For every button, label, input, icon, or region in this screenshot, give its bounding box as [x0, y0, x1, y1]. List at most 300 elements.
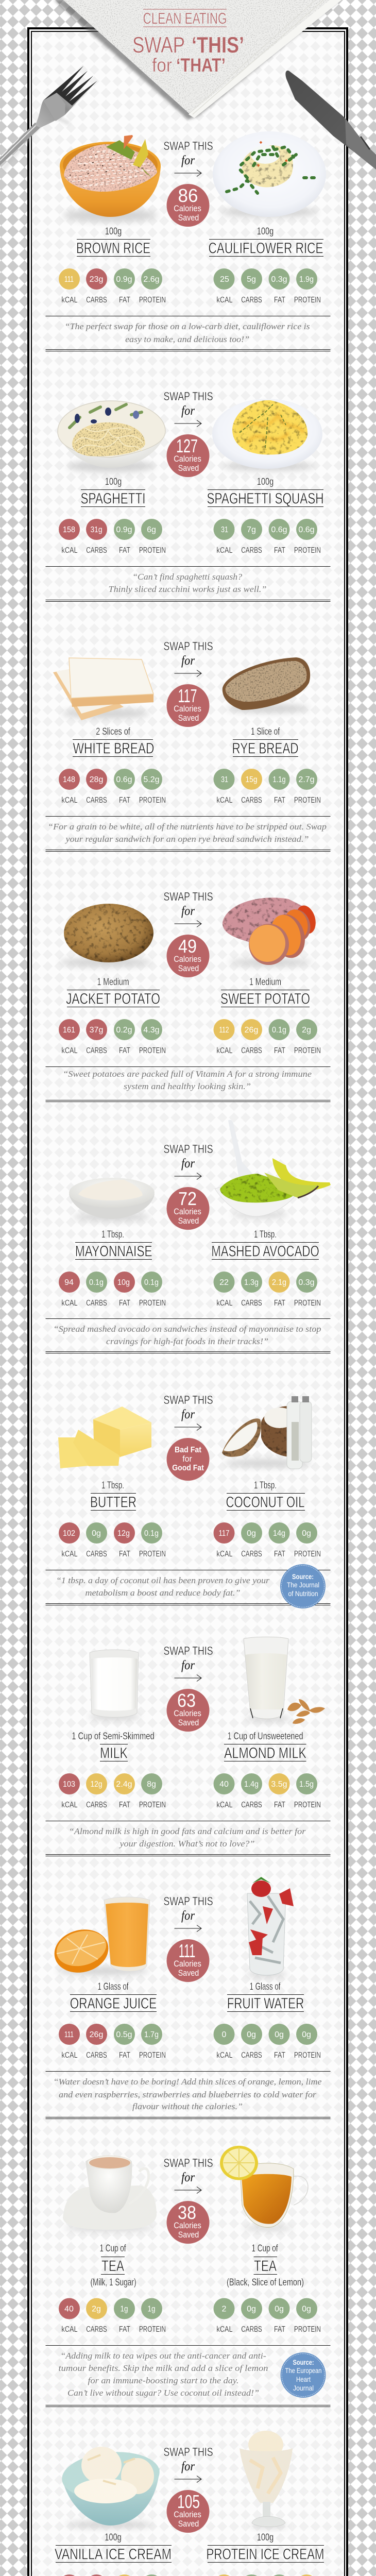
- left nutrition values: [59, 519, 166, 555]
- right nutrition values: 0g: [302, 2305, 311, 2313]
- heading: swap this for with arrow: SWAP THIS: [164, 1393, 213, 1406]
- right food name: [227, 1981, 304, 2012]
- icon: knife: [285, 71, 376, 170]
- calories saved badge: Saved: [178, 463, 199, 473]
- left nutrition values: FAT: [119, 1801, 130, 1809]
- calories saved badge: 117: [178, 685, 197, 706]
- right nutrition values: 0.6g: [298, 526, 315, 534]
- tip quote: and even raspberries, strawberries and blueberries to cold water for: [59, 2090, 316, 2099]
- panel: tea swap: [45, 2146, 331, 2407]
- left nutrition values: PROTEIN: [139, 1801, 166, 1809]
- image: cauliflower rice plate: [213, 131, 326, 217]
- tip quote: [45, 1319, 331, 1353]
- right nutrition values: FAT: [274, 1801, 285, 1809]
- calories saved badge: 49: [178, 936, 197, 957]
- calories saved badge: [167, 684, 209, 727]
- right nutrition values: 0g: [247, 2305, 256, 2313]
- left nutrition values: 31g: [91, 526, 102, 534]
- left nutrition values: FAT: [119, 2051, 130, 2060]
- heading: swap this for with arrow: for: [181, 1658, 195, 1672]
- panel: brown rice swap: [45, 131, 331, 351]
- title: ‘THAT’: [176, 55, 226, 76]
- right nutrition values: CARBS: [241, 796, 262, 805]
- text block: swap details: [45, 1644, 331, 1856]
- heading: swap this for with arrow: [164, 1894, 213, 1932]
- right nutrition values: 0g: [302, 1529, 311, 1538]
- right nutrition values: [213, 1019, 321, 1055]
- left food name: [55, 2532, 172, 2563]
- left nutrition values: kCAL: [62, 2325, 78, 2334]
- panel: white bread swap: [45, 639, 331, 851]
- image: coconut and oil bottles: [222, 1396, 312, 1469]
- left food name: BUTTER: [90, 1494, 136, 1511]
- left nutrition values: CARBS: [86, 546, 107, 555]
- left nutrition values: 2g: [92, 2305, 101, 2313]
- left nutrition values: FAT: [119, 1046, 130, 1055]
- left food name: 1 Tbsp.: [101, 1480, 124, 1491]
- left nutrition values: 0.9g: [116, 275, 132, 284]
- tip quote: [45, 2345, 331, 2407]
- calories saved badge: Saved: [178, 2230, 199, 2240]
- right nutrition values: 0g: [247, 1529, 256, 1538]
- right nutrition values: [213, 2024, 321, 2060]
- tip quote: [45, 567, 331, 602]
- calories saved badge: Saved: [178, 2519, 199, 2529]
- left nutrition values: 158: [63, 526, 75, 534]
- right nutrition values: PROTEIN: [294, 546, 321, 555]
- heading: swap this for with arrow: [164, 2445, 213, 2482]
- calories saved badge: 38: [178, 2202, 196, 2223]
- right nutrition values: 0.3g: [298, 1278, 315, 1287]
- calories saved badge: Saved: [178, 1968, 199, 1978]
- left food name: 100g: [105, 477, 122, 487]
- left nutrition values: FAT: [119, 546, 130, 555]
- image: orange juice glass and orange: [50, 1897, 150, 1978]
- image: rye bread slice: [223, 657, 310, 713]
- left nutrition values: 0g: [92, 1529, 101, 1538]
- callout: source the european heart journal: [280, 2352, 326, 2398]
- right nutrition values: 40: [219, 1780, 229, 1789]
- right nutrition values: [213, 2574, 321, 2576]
- left nutrition values: kCAL: [62, 2051, 78, 2060]
- right nutrition values: 2: [222, 2305, 227, 2313]
- callout: source the journal of nutrition: of Nutrition: [288, 1589, 318, 1598]
- tip quote: “Adding milk to tea wipes out the anti-cancer and anti-: [60, 2351, 266, 2361]
- left nutrition values: CARBS: [86, 1046, 107, 1055]
- right food name: COCONUT OIL: [226, 1494, 305, 1511]
- left nutrition values: kCAL: [62, 1046, 78, 1055]
- right food name: (Black, Slice of Lemon): [227, 2277, 304, 2288]
- tip quote: Can’t live without sugar? Use coconut oil instead!”: [67, 2388, 259, 2398]
- heading: swap this for with arrow: SWAP THIS: [164, 639, 213, 653]
- left nutrition values: 102: [63, 1529, 75, 1538]
- tip quote: [45, 316, 331, 351]
- left nutrition values: 111: [64, 2030, 74, 2039]
- heading: swap this for with arrow: for: [181, 404, 195, 418]
- calories saved badge: 63: [177, 1690, 196, 1711]
- left nutrition values: PROTEIN: [139, 1299, 166, 1308]
- left nutrition values: 37g: [90, 1026, 103, 1035]
- left nutrition values: 2.6g: [143, 275, 160, 284]
- left nutrition values: [59, 1019, 166, 1055]
- left nutrition values: 161: [63, 1026, 75, 1035]
- calories saved badge: [167, 1689, 209, 1732]
- right food name: 1 Tbsp.: [254, 1229, 277, 1240]
- right nutrition values: 112: [219, 1026, 229, 1035]
- left nutrition values: FAT: [119, 1299, 130, 1308]
- left food name: 1 Cup of Semi-Skimmed: [72, 1731, 155, 1742]
- heading: swap this for with arrow: for: [181, 654, 195, 668]
- right food name: FRUIT WATER: [227, 1995, 304, 2012]
- right nutrition values: 31: [221, 775, 228, 784]
- right nutrition values: CARBS: [241, 2325, 262, 2334]
- right food name: 100g: [257, 226, 274, 237]
- left nutrition values: 5.2g: [143, 775, 160, 784]
- right nutrition values: kCAL: [216, 546, 233, 555]
- left nutrition values: 8g: [147, 1780, 156, 1789]
- left food name: 100g: [105, 2532, 122, 2543]
- panel: jacket potato swap: [45, 890, 331, 1101]
- right food name: 1 Slice of: [251, 726, 280, 737]
- right nutrition values: 1.9g: [299, 275, 314, 284]
- tip quote: “The perfect swap for those on a low-carb diet, cauliflower rice is: [65, 321, 310, 331]
- right nutrition values: FAT: [274, 796, 285, 805]
- text block: swap details: [45, 389, 331, 602]
- right nutrition values: FAT: [274, 1550, 285, 1558]
- right nutrition values: FAT: [274, 2051, 285, 2060]
- left food name: [80, 477, 145, 507]
- left nutrition values: [59, 1522, 166, 1558]
- right nutrition values: 7g: [247, 526, 256, 534]
- right nutrition values: 0g: [275, 2030, 284, 2039]
- left nutrition values: PROTEIN: [139, 1046, 166, 1055]
- heading: swap this for with arrow: SWAP THIS: [164, 389, 213, 403]
- left food name: 1 Medium: [97, 977, 129, 988]
- right food name: RYE BREAD: [232, 740, 299, 757]
- title: SWAP: [132, 32, 185, 58]
- heading: swap this for with arrow: [164, 639, 213, 677]
- image: almond milk and almonds: [244, 1637, 325, 1724]
- left nutrition values: CARBS: [86, 1299, 107, 1308]
- left nutrition values: [59, 769, 166, 805]
- left food name: BROWN RICE: [76, 240, 150, 257]
- left food name: ORANGE JUICE: [70, 1995, 157, 2012]
- right nutrition values: [213, 769, 321, 805]
- tip quote: [45, 1066, 331, 1101]
- image: glass of milk: [89, 1650, 140, 1720]
- calories saved badge: Calories: [174, 1207, 201, 1216]
- left nutrition values: kCAL: [62, 546, 78, 555]
- right nutrition values: 14g: [273, 1529, 285, 1538]
- calories saved badge: Calories: [174, 2510, 201, 2519]
- left nutrition values: CARBS: [86, 2325, 107, 2334]
- right nutrition values: FAT: [274, 1046, 285, 1055]
- image: sweet potato slices: [223, 897, 319, 967]
- calories saved badge: [167, 935, 209, 977]
- left nutrition values: [59, 1272, 166, 1308]
- heading: swap this for with arrow: for: [181, 1909, 195, 1923]
- left nutrition values: 94: [64, 1278, 74, 1287]
- right nutrition values: [213, 519, 321, 555]
- left nutrition values: FAT: [119, 796, 130, 805]
- left food name: [72, 1731, 155, 1762]
- heading: swap this for with arrow: for: [181, 2171, 195, 2184]
- right nutrition values: CARBS: [241, 1299, 262, 1308]
- text block: swap details: [45, 1142, 331, 1353]
- left food name: 2 Slices of: [96, 726, 130, 737]
- bad fat for good fat badge: Bad Fat: [175, 1446, 202, 1454]
- heading: swap this for with arrow: [164, 890, 213, 927]
- image: jacket potato: [59, 904, 153, 967]
- right nutrition values: [213, 1773, 321, 1809]
- left nutrition values: 1g: [147, 2305, 156, 2313]
- image: mayonnaise dish: [69, 1178, 155, 1221]
- calories saved badge: Calories: [174, 1708, 201, 1718]
- image: black tea with lemon: [220, 2146, 308, 2231]
- left nutrition values: kCAL: [62, 296, 78, 304]
- right nutrition values: 1.5g: [299, 1780, 314, 1789]
- left nutrition values: 4.3g: [143, 1026, 160, 1035]
- left nutrition values: PROTEIN: [139, 796, 166, 805]
- calories saved badge: Saved: [178, 213, 199, 223]
- bad fat for good fat badge: [167, 1438, 209, 1481]
- right nutrition values: 0.6g: [271, 526, 287, 534]
- right nutrition values: 117: [218, 1529, 230, 1538]
- calories saved badge: 111: [179, 1940, 195, 1961]
- calories saved badge: Calories: [174, 204, 201, 213]
- tip quote: flavour without the calories.”: [132, 2102, 243, 2111]
- right food name: 100g: [257, 2532, 274, 2543]
- right nutrition values: [213, 1522, 321, 1558]
- right nutrition values: 22: [219, 1278, 229, 1287]
- left nutrition values: PROTEIN: [139, 2325, 166, 2334]
- text block: swap details: [45, 639, 331, 851]
- right food name: [224, 1731, 306, 1762]
- left food name: 100g: [105, 226, 122, 237]
- right food name: TEA: [254, 2258, 277, 2275]
- left food name: VANILLA ICE CREAM: [55, 2546, 172, 2563]
- callout: source the european heart journal: Journal: [293, 2384, 314, 2392]
- calories saved badge: Saved: [178, 963, 199, 973]
- right food name: ALMOND MILK: [224, 1744, 306, 1762]
- title: for: [152, 55, 172, 76]
- left nutrition values: 0.2g: [116, 1026, 132, 1035]
- left food name: (Milk, 1 Sugar): [91, 2277, 136, 2288]
- right food name: 1 Glass of: [249, 1981, 281, 1992]
- heading: swap this for with arrow: for: [181, 1157, 195, 1171]
- left food name: MILK: [100, 1744, 128, 1762]
- heading: swap this for with arrow: SWAP THIS: [164, 139, 213, 152]
- heading: swap this for with arrow: SWAP THIS: [164, 2156, 213, 2170]
- heading: swap this for with arrow: SWAP THIS: [164, 1894, 213, 1908]
- heading: swap this for with arrow: [164, 1142, 213, 1180]
- tip quote: “For a grain to be white, all of the nutrients have to be stripped out. Swap: [48, 822, 327, 832]
- left nutrition values: 148: [63, 775, 75, 784]
- calories saved badge: Calories: [174, 2221, 201, 2230]
- tip quote: your regular sandwich for an open rye bread sandwich instead.”: [64, 834, 309, 844]
- right nutrition values: kCAL: [216, 1046, 233, 1055]
- image: white bread slices: [53, 658, 153, 720]
- right nutrition values: 26g: [245, 1026, 258, 1035]
- callout: source the journal of nutrition: The Journal: [287, 1581, 319, 1589]
- tip quote: cravings for high-fat foods in their tracks!”: [106, 1336, 268, 1346]
- right nutrition values: kCAL: [216, 1550, 233, 1558]
- calories saved badge: [167, 1187, 209, 1230]
- calories saved badge: [167, 1939, 209, 1982]
- image: mashed avocado on spoon: [215, 1120, 331, 1218]
- right nutrition values: 0.3g: [271, 275, 287, 284]
- tip quote: “Spread mashed avocado on sandwiches instead of mayonnaise to stop: [54, 1324, 321, 1334]
- heading: swap this for with arrow: for: [181, 1408, 195, 1421]
- right nutrition values: CARBS: [241, 2051, 262, 2060]
- text block: swap details: [45, 139, 331, 351]
- bad fat for good fat badge: Good Fat: [172, 1464, 204, 1472]
- right food name: CAULIFLOWER RICE: [208, 240, 323, 257]
- panel: orange juice swap: [45, 1877, 331, 2119]
- heading: swap this for with arrow: [164, 1393, 213, 1430]
- left nutrition values: FAT: [119, 296, 130, 304]
- calories saved badge: 105: [177, 2491, 200, 2512]
- bad fat for good fat badge: for: [182, 1454, 192, 1464]
- left nutrition values: 0.1g: [144, 1278, 159, 1287]
- right nutrition values: FAT: [274, 296, 285, 304]
- text block: swap details: [45, 1393, 331, 1605]
- calories saved badge: Calories: [174, 704, 201, 714]
- left food name: MAYONNAISE: [75, 1243, 152, 1260]
- image: spaghetti bowl: [58, 401, 165, 472]
- left nutrition values: 1g: [121, 2305, 128, 2313]
- calories saved badge: 72: [178, 1188, 197, 1209]
- panel: milk swap: [45, 1637, 331, 1856]
- right nutrition values: CARBS: [241, 296, 262, 304]
- image: butter block: [58, 1406, 151, 1468]
- title: CLEAN EATING: [143, 9, 227, 27]
- calories saved badge: [167, 434, 209, 477]
- right food name: [226, 1480, 305, 1511]
- left nutrition values: [59, 2298, 166, 2334]
- left food name: [70, 1981, 157, 2012]
- right nutrition values: PROTEIN: [294, 1801, 321, 1809]
- panel: spaghetti swap: [45, 389, 331, 602]
- left food name: [91, 2243, 136, 2288]
- left nutrition values: 2.4g: [116, 1780, 132, 1789]
- right nutrition values: 5g: [247, 275, 256, 284]
- tip quote: tumour benefits. Skip the milk and add a slice of lemon: [59, 2363, 268, 2373]
- image: tea with milk on saucer: [63, 2156, 157, 2231]
- left nutrition values: kCAL: [62, 1299, 78, 1308]
- right food name: MASHED AVOCADO: [211, 1243, 319, 1260]
- tip quote: “Almond milk is high in good fats and calcium and is better for: [69, 1826, 306, 1836]
- heading: swap this for with arrow: SWAP THIS: [164, 1644, 213, 1657]
- heading: swap this for with arrow: SWAP THIS: [164, 1142, 213, 1156]
- tip quote: “1 tbsp. a day of coconut oil has been proven to give your: [56, 1575, 269, 1585]
- right nutrition values: 2g: [302, 1026, 311, 1035]
- callout: source the journal of nutrition: Source:: [292, 1572, 314, 1581]
- right food name: [211, 1229, 319, 1260]
- tip quote: your digestion. What’s not to love?”: [118, 1839, 255, 1849]
- right nutrition values: kCAL: [216, 2051, 233, 2060]
- right nutrition values: [213, 1272, 321, 1308]
- tip quote: “Sweet potatoes are packed full of Vitamin A for a strong immune: [63, 1069, 312, 1079]
- heading: swap this for with arrow: SWAP THIS: [164, 2445, 213, 2459]
- heading: swap this for with arrow: [164, 2156, 213, 2194]
- panel: ice cream swap: [45, 2431, 333, 2576]
- right food name: [232, 726, 299, 757]
- right nutrition values: CARBS: [241, 1801, 262, 1809]
- left nutrition values: 10g: [117, 1278, 130, 1287]
- right food name: 1 Cup of: [251, 2243, 278, 2254]
- tip quote: “Can’t find spaghetti squash?: [132, 572, 243, 582]
- left nutrition values: PROTEIN: [139, 296, 166, 304]
- calories saved badge: [167, 2490, 209, 2533]
- left food name: [75, 1229, 152, 1260]
- right food name: 1 Medium: [249, 977, 281, 988]
- right nutrition values: PROTEIN: [294, 2325, 321, 2334]
- heading: swap this for with arrow: for: [181, 154, 195, 167]
- left nutrition values: kCAL: [62, 1550, 78, 1558]
- left nutrition values: [59, 2574, 166, 2576]
- right food name: [227, 2243, 304, 2288]
- left nutrition values: 0.6g: [116, 775, 132, 784]
- right nutrition values: 0.1g: [272, 1026, 286, 1035]
- image: spaghetti squash plate: [212, 399, 322, 471]
- callout: source the journal of nutrition: [280, 1564, 326, 1608]
- heading: swap this for with arrow: [164, 139, 213, 176]
- left nutrition values: PROTEIN: [139, 1550, 166, 1558]
- left nutrition values: 111: [64, 275, 74, 284]
- calories saved badge: [167, 184, 209, 227]
- calories saved badge: 86: [178, 185, 198, 206]
- right nutrition values: PROTEIN: [294, 1550, 321, 1558]
- right nutrition values: 2.7g: [298, 775, 315, 784]
- calories saved badge: Calories: [174, 954, 201, 964]
- title: [132, 9, 244, 76]
- image: brown rice bowl: [60, 135, 161, 222]
- right food name: 1 Cup of Unsweetened: [228, 1731, 303, 1742]
- text block: swap details: [45, 2156, 331, 2407]
- right food name: SWEET POTATO: [220, 990, 310, 1008]
- heading: swap this for with arrow: SWAP THIS: [164, 890, 213, 903]
- left nutrition values: FAT: [119, 1550, 130, 1558]
- calories saved badge: Saved: [178, 1718, 199, 1727]
- left nutrition values: PROTEIN: [139, 546, 166, 555]
- right nutrition values: 0g: [275, 2305, 284, 2313]
- text block: swap details: [45, 890, 331, 1101]
- left food name: [66, 977, 160, 1008]
- left nutrition values: 0.5g: [116, 2030, 132, 2039]
- image: protein ice cream sundae: [240, 2431, 293, 2528]
- left nutrition values: 0.1g: [144, 1529, 159, 1538]
- right nutrition values: 1.3g: [244, 1278, 259, 1287]
- right nutrition values: kCAL: [216, 2325, 233, 2334]
- left nutrition values: CARBS: [86, 796, 107, 805]
- right nutrition values: FAT: [274, 546, 285, 555]
- right nutrition values: 3.5g: [271, 1780, 287, 1789]
- right nutrition values: 1.4g: [244, 1780, 259, 1789]
- left nutrition values: 1.7g: [144, 2030, 159, 2039]
- calories saved badge: Saved: [178, 1216, 199, 1226]
- right nutrition values: kCAL: [216, 296, 233, 304]
- left nutrition values: [59, 1773, 166, 1809]
- calories saved badge: [167, 2201, 209, 2244]
- left food name: [73, 726, 155, 757]
- callout: source the european heart journal: The European: [285, 2366, 321, 2375]
- text block: swap details: [45, 2445, 333, 2576]
- right food name: [207, 477, 323, 507]
- tip quote: [45, 1821, 331, 1856]
- heading: swap this for with arrow: for: [181, 2460, 195, 2473]
- left nutrition values: 28g: [90, 775, 103, 784]
